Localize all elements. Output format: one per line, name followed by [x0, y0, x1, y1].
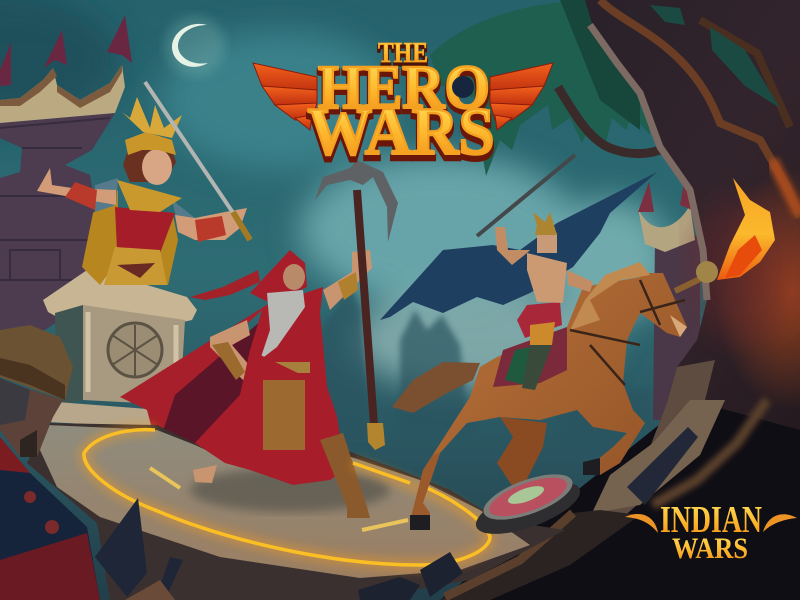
pedestal: [43, 268, 197, 428]
logo: The Hero Wars: [253, 37, 553, 174]
stone shadow under wizard: [190, 468, 390, 512]
foreground warrior: [0, 325, 463, 600]
logo word: HERO: HERO: [318, 54, 490, 122]
palm branch: [558, 87, 665, 154]
stone platform: [27, 423, 565, 600]
right temple: [638, 182, 700, 420]
sky clouds: [0, 0, 670, 390]
crescent moon: [165, 16, 225, 76]
logo: Indian Wars: [625, 499, 797, 565]
logo word: THE: THE: [378, 37, 428, 69]
glowing rune circle: [84, 430, 490, 565]
tree trunk: [440, 0, 800, 600]
logo wings: [253, 63, 553, 130]
wizard figure: [120, 250, 372, 518]
logo word: WARS: WARS: [308, 98, 494, 174]
battle axe: [315, 160, 398, 450]
queen figure: [37, 82, 250, 285]
logo word: THE: THE: [378, 40, 428, 72]
torch flame: [675, 178, 775, 291]
distant ruins: [320, 280, 650, 450]
logo word: HERO: HERO: [318, 58, 490, 126]
rider figure: [477, 155, 593, 390]
bat wings: [380, 172, 657, 320]
logo: Indian Wars: WARS: [672, 532, 748, 565]
palm leaves: [430, 0, 650, 176]
horse: [392, 262, 687, 530]
logo: Indian Wars: INDIAN: [660, 499, 762, 541]
left temple: [0, 15, 132, 345]
horse hoof and shield in front of floor: [410, 453, 586, 545]
wizard robe hem: [193, 350, 370, 518]
logo word: WARS: WARS: [308, 93, 494, 169]
